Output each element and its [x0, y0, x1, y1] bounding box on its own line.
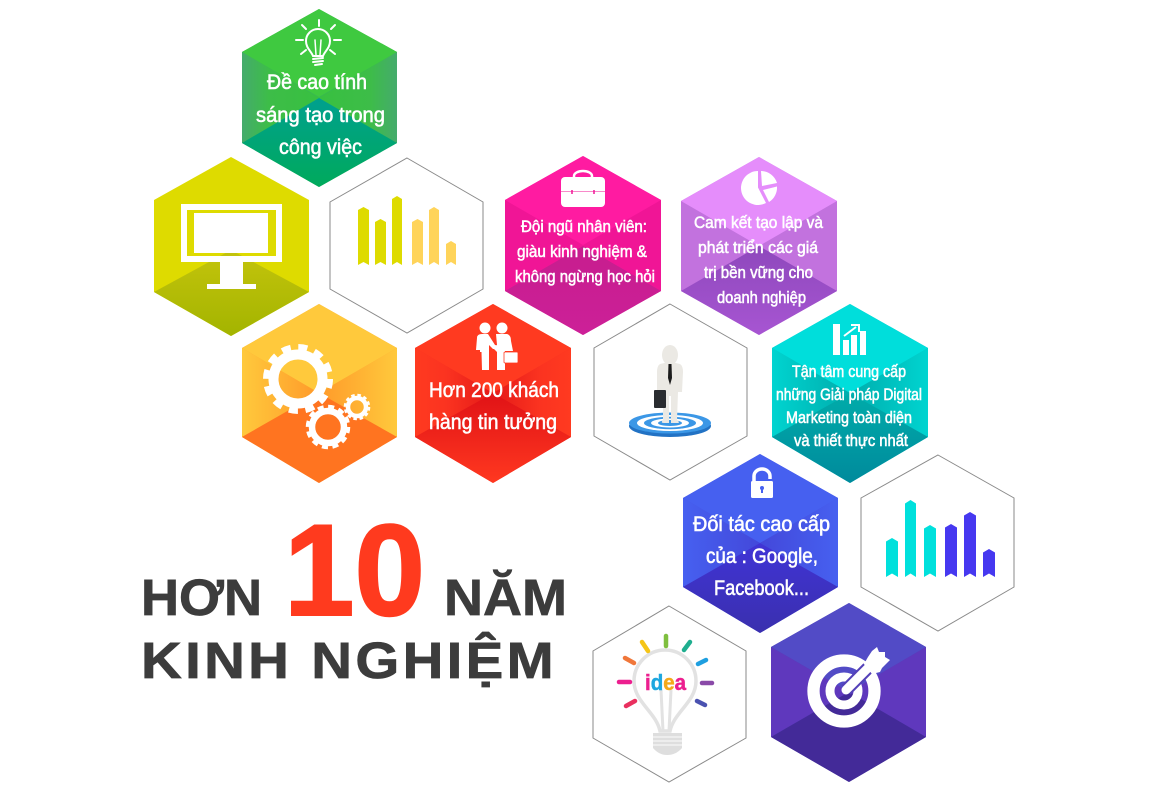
text: clients: [429, 379, 559, 434]
icon: open padlock: [751, 469, 773, 498]
text: team: Đội ngũ nhân viên:: [521, 217, 647, 236]
bar chart: teal and blue: [886, 500, 995, 577]
text: digital marketing: Tận tâm cung cấp: [792, 363, 906, 381]
text: commitment: doanh nghiệp: [717, 288, 806, 307]
text: partners: Đối tác cao cấp: [693, 513, 830, 536]
panel: digital marketing hexagon: [772, 304, 928, 483]
icon: gears: [266, 348, 369, 447]
text: 10: 10: [284, 497, 425, 643]
text: partners: của : Google,: [706, 545, 818, 568]
panel: commitment hexagon: [681, 157, 837, 335]
icon: briefcase: [561, 171, 605, 207]
text: commitment: [694, 213, 823, 307]
text: creativity: [256, 71, 385, 159]
heading: more than 10 years of experience: [141, 497, 567, 689]
panel: partners hexagon: [683, 454, 838, 633]
text: partners: Facebook...: [714, 577, 809, 600]
icon: idea bulb: idea: [645, 670, 687, 695]
icon: handshake: [476, 322, 518, 370]
text: clients: hàng tin tưởng: [429, 411, 557, 434]
text: creativity: sáng tạo trong: [256, 104, 385, 127]
text: commitment: phát triển các giá: [698, 238, 819, 257]
text: creativity: Đề cao tính: [267, 71, 367, 94]
text: clients: Hơn 200 khách: [429, 379, 559, 402]
panel: creativity hexagon: [242, 9, 397, 187]
panel: teal and blue bar chart hexagon: [861, 455, 1014, 631]
text: commitment: trị bền vững cho: [704, 263, 813, 282]
panel: team hexagon: [505, 156, 661, 335]
text: KINH NGHIỆM: KINH NGHIỆM: [141, 631, 557, 689]
icon: rising chart: [833, 324, 866, 355]
text: NĂM: NĂM: [444, 569, 567, 626]
text: digital marketing: [776, 363, 922, 450]
panel: clients hexagon: [415, 304, 571, 483]
text: team: không ngừng học hỏi: [515, 267, 655, 286]
text: digital marketing: và thiết thực nhất: [794, 432, 908, 450]
text: creativity: công việc: [279, 136, 362, 159]
icon: target with arrow: [814, 647, 890, 722]
icon: light bulb: [296, 20, 341, 65]
panel: target hexagon: [771, 603, 926, 782]
panel: businessman on target hexagon: [594, 304, 747, 480]
icon: monitor: [181, 204, 282, 289]
icon: target base: [629, 412, 711, 437]
text: commitment: Cam kết tạo lập và: [694, 213, 823, 232]
panel: monitor hexagon: [154, 157, 309, 336]
text: partners: [693, 513, 830, 600]
icon: pie chart: [741, 171, 777, 205]
panel: yellow bar chart hexagon: [330, 158, 483, 333]
icon: idea bulb: [619, 636, 712, 755]
text: HƠN: HƠN: [141, 569, 262, 626]
text: digital marketing: những Giải pháp Digital: [776, 386, 922, 404]
text: digital marketing: Marketing toàn diện: [786, 409, 912, 427]
bar chart: yellow: [358, 196, 456, 265]
text: team: giàu kinh nghiệm &: [517, 242, 648, 261]
icon: businessman: [654, 345, 683, 423]
panel: idea bulb hexagon: [593, 606, 746, 782]
panel: gears hexagon: [242, 304, 397, 483]
text: team: [515, 217, 655, 286]
